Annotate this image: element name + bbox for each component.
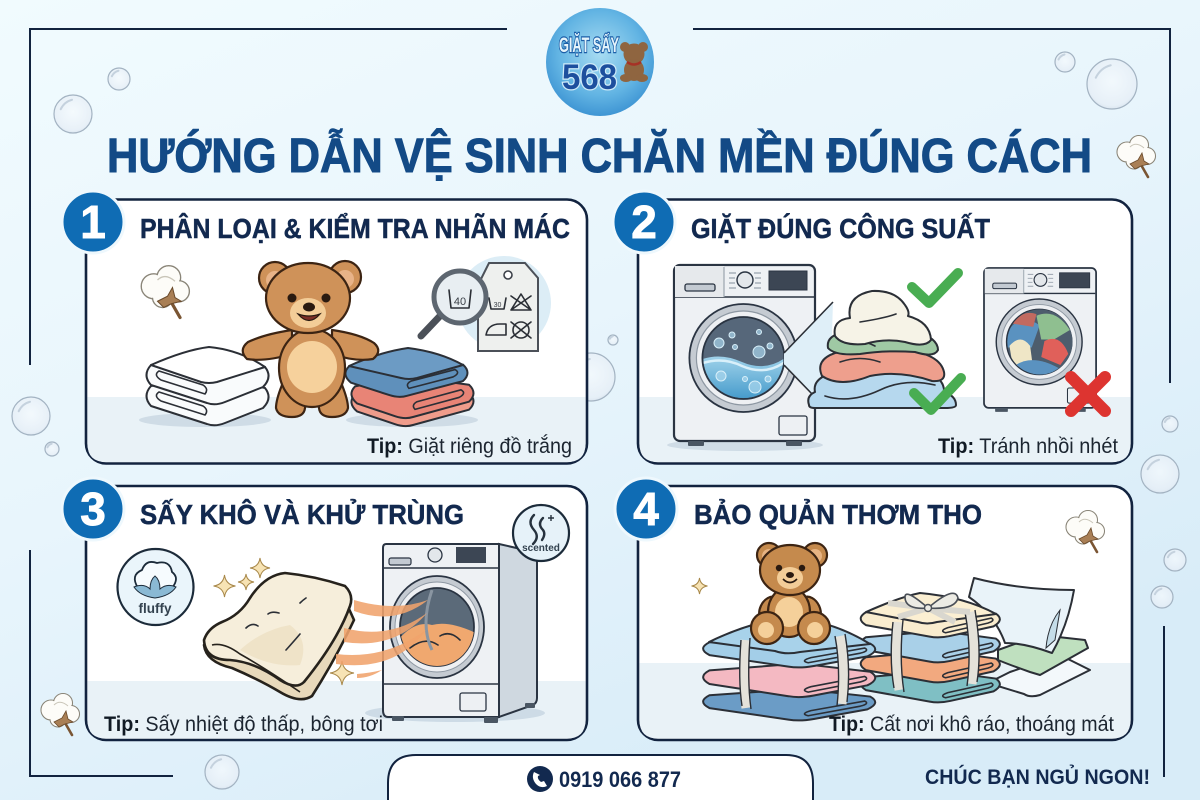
closing message: CHÚC BẠN NGỦ NGON!: [925, 765, 1150, 789]
hot air streaks: [336, 600, 428, 678]
cotton boll top right: [1117, 136, 1156, 177]
panel 1 floor: [88, 397, 586, 462]
panel 2 heading: GIẶT ĐÚNG CÔNG SUẤT: [691, 212, 990, 244]
pillows: [969, 578, 1090, 696]
step badge 1: [62, 191, 124, 253]
contact tab: [388, 755, 813, 800]
panel 4 heading: BẢO QUẢN THƠM THO: [694, 498, 982, 530]
care label tag with magnifier: [421, 256, 551, 351]
panel 2 card: [638, 200, 1132, 464]
icon: phone: [527, 766, 553, 792]
panel 4 card: [638, 486, 1132, 740]
step badge 4: 4: [633, 483, 659, 535]
sparkle: [692, 578, 708, 594]
fluffy badge: [118, 549, 194, 625]
folded blue and coral towels: [345, 348, 478, 427]
large washing machine: [667, 265, 833, 451]
panel 3 card: [86, 486, 587, 740]
fluffy badge: fluffy: [138, 601, 172, 616]
panel 4 tip: Tip: Cất nơi khô ráo, thoáng mát: [829, 713, 1114, 736]
step badge 2: 2: [631, 196, 657, 248]
stack of laundry: [808, 291, 956, 408]
panel 4 floor: [640, 663, 1130, 738]
sparkles around blanket: [214, 558, 354, 685]
panel 4: fragrant storage: [615, 478, 1132, 740]
fluffy cream blanket: [204, 573, 354, 699]
panel 3 heading: SẤY KHÔ VÀ KHỬ TRÙNG: [140, 498, 464, 530]
panel 3: dry and disinfect: [62, 478, 587, 740]
panel 1: sort and check labels: [62, 191, 587, 464]
left stack of folded blankets: [703, 617, 875, 720]
scented badge: scented: [522, 543, 560, 554]
logo: [546, 8, 654, 116]
teddy bear sitting: [751, 543, 830, 644]
red cross: [1071, 377, 1105, 411]
step badge 2: [613, 191, 675, 253]
teddy bear standing: [243, 261, 378, 417]
panel 3 tip: Tip: Sấy nhiệt độ thấp, bông tơi: [104, 713, 383, 736]
care label tag with magnifier: 40: [454, 296, 466, 308]
panel 3 floor: [88, 681, 586, 738]
panel 1 card: [86, 200, 587, 464]
small overloaded washing machine: [984, 268, 1096, 412]
tab shape: [388, 755, 813, 800]
step badge 3: [62, 478, 124, 540]
care label tag with magnifier: 30: [494, 302, 501, 309]
icon: cotton boll: [1066, 510, 1104, 552]
green check bottom: [914, 378, 961, 410]
step badge 3: 3: [80, 483, 106, 535]
scented badge: [513, 505, 569, 561]
cotton boll bottom left: [41, 694, 80, 735]
panel 1 tip: Tip: Giặt riêng đồ trắng: [367, 435, 572, 458]
step badge 1: 1: [80, 196, 106, 248]
right stack of folded blankets with bow: [861, 593, 1000, 702]
icon: cotton boll: [141, 266, 189, 318]
logo: 568: [562, 58, 617, 97]
panel 2 floor: [640, 397, 1130, 462]
folded white towels: [139, 347, 271, 427]
panel 2: correct wash load: [613, 191, 1132, 464]
phone number: 0919 066 877: [559, 767, 681, 792]
panel 1 heading: PHÂN LOẠI & KIỂM TRA NHÃN MÁC: [140, 213, 570, 244]
dryer machine: [365, 544, 545, 723]
panel 2 tip: Tip: Tránh nhồi nhét: [938, 435, 1118, 458]
logo: GIẶT SẤY: [559, 34, 619, 57]
step badge 4: [615, 478, 677, 540]
green check top: [912, 273, 958, 303]
title: HƯỚNG DẪN VỆ SINH CHĂN MỀN ĐÚNG CÁCH: [107, 128, 1092, 183]
